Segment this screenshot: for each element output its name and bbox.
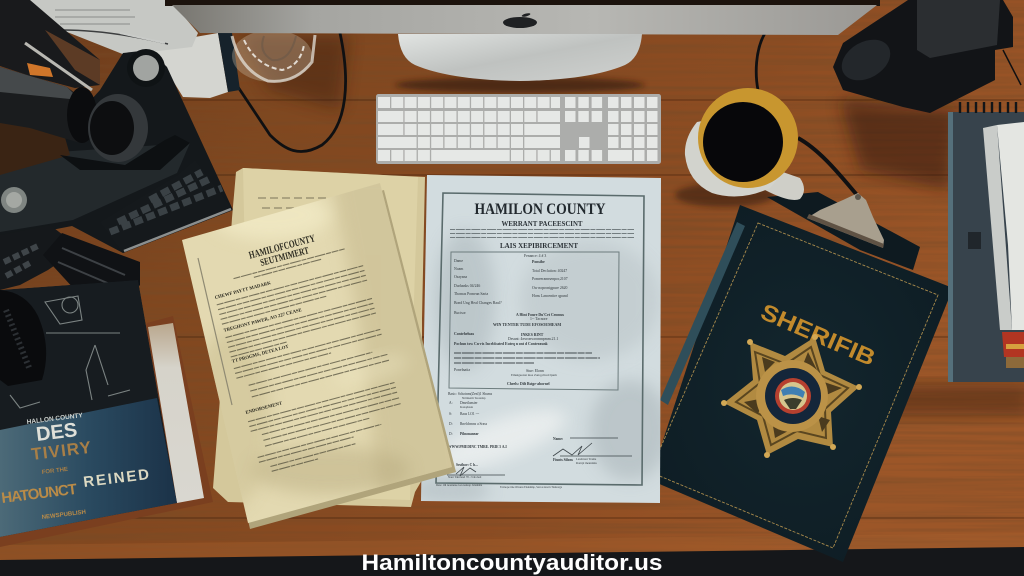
warrant numbered list: Tavnope tine Obsuru Endemnp, Savos nawrn Tianrorgs bbox=[500, 486, 562, 489]
warrant inner table bbox=[449, 252, 619, 390]
warrant inner table: INKES RINT bbox=[521, 333, 544, 337]
black desktop keyboard and camera gear bbox=[0, 0, 233, 290]
warrant numbered list: S: bbox=[449, 412, 452, 416]
warrant numbered list: Nrtitnerm Teoanlap bbox=[462, 396, 486, 400]
warrant numbered list: Baus LO1 --- bbox=[460, 412, 480, 416]
tan document highlighted section label: ENDORSEMENT bbox=[245, 401, 284, 416]
warrant numbered list: A: bbox=[449, 401, 453, 405]
keyboard bbox=[376, 94, 661, 164]
tan document subtitle: SEUTMIMERT bbox=[259, 245, 311, 269]
clipboard backing bbox=[767, 192, 920, 270]
magazine small heading: HALLON COUNTY bbox=[26, 412, 84, 426]
mug handle bbox=[765, 170, 804, 200]
warrant inner table: Hons Lancentire qpund bbox=[532, 294, 568, 298]
warrant numbered list: Nant Tahrtand 70. J Orobed bbox=[448, 475, 482, 479]
magazine publisher mark: NEWSPUBLISH bbox=[42, 510, 86, 521]
gold sheriff star badge bbox=[721, 334, 862, 458]
binoculars on the magazine corner bbox=[43, 233, 140, 307]
warrant numbered list: Basic: Schotnm(Zenl)1 Shums bbox=[448, 392, 493, 396]
tan document section heading one: CHEWF PAYTT MADARK bbox=[214, 281, 272, 301]
white warrant document bbox=[410, 175, 670, 504]
warrant numbered list: Rnelchmns a Srass bbox=[460, 422, 488, 426]
warrant inner table: Desant: 4nvronwronnnpmm.21.1 bbox=[508, 337, 558, 341]
warrant inner table: Ow nopronigpure 2620 bbox=[532, 286, 568, 290]
warrant inner table: Noam bbox=[454, 267, 463, 271]
warrant inner table: Thomas Pomean Saria bbox=[454, 292, 488, 296]
warrant title: HAMILON COUNTY bbox=[474, 201, 606, 218]
warrant inner table: Bond Ung Heal Changes Baul? bbox=[454, 301, 502, 305]
magazine blue photo bbox=[0, 398, 177, 537]
sheriff folder bbox=[650, 192, 953, 562]
warrant inner table: Emsngeoton ntoe Zonq pliced lpum bbox=[511, 373, 557, 377]
warrant inner table: Osayana bbox=[454, 275, 467, 279]
headset bbox=[0, 290, 46, 386]
coffee mug bbox=[685, 88, 804, 200]
warrant inner table: A Hint Foure Du'Cet Cromus bbox=[516, 313, 564, 317]
warrant subtitle: WERRANT PACEESCINT bbox=[502, 220, 583, 228]
warrant inner table: WIN TENTER TUDE EFOSOEMEAM bbox=[493, 322, 561, 327]
warrant inner table: Cheels: Dilt Bstge-abornel bbox=[507, 382, 550, 386]
tan document title: HAMILOFCOUNTY bbox=[248, 233, 317, 262]
warrant numbered list: D: bbox=[449, 432, 453, 436]
magazine illustration bbox=[10, 296, 130, 408]
icon: apple logo bbox=[503, 12, 537, 28]
warrant inner table: Dame bbox=[454, 259, 463, 263]
back stack of tan papers bbox=[213, 168, 425, 507]
magazine title TIVIRY: TIVIRY bbox=[30, 438, 93, 464]
tan document section heading two: TREGHONT PAWER, AO 227 CEASE bbox=[223, 308, 302, 334]
white sheet in tray bbox=[148, 323, 204, 503]
warrant inner table: Stue: Elonn bbox=[526, 369, 544, 373]
website caption: Hamiltoncountyauditor.us bbox=[362, 550, 662, 575]
tan document section heading three: TT PROGMS, DETEA LOT bbox=[232, 345, 290, 365]
gold stitched border bbox=[650, 223, 938, 548]
metal clip bbox=[807, 193, 884, 248]
warrant inner table: Fenance: 4 # 3 bbox=[524, 254, 546, 258]
framed tray behind magazine bbox=[0, 316, 213, 547]
warrant outer border bbox=[436, 193, 644, 485]
warrant numbered list: Rornpl meuntnks bbox=[576, 461, 598, 465]
warrant inner table: Durhanks 04/246 bbox=[454, 284, 480, 288]
warrant numbered list: Name: bbox=[553, 437, 563, 441]
warrant numbered list bbox=[436, 392, 598, 489]
monitor stand bbox=[398, 34, 642, 81]
desk cables bbox=[230, 33, 1021, 195]
warrant numbered list: Fiunts Silons bbox=[553, 458, 573, 462]
notebook right edge bbox=[948, 102, 1024, 382]
top-left stack of papers bbox=[27, 0, 240, 98]
warrant inner table: Total Declution: 40247 bbox=[532, 269, 567, 273]
magazine word REINED: REINED bbox=[82, 466, 150, 491]
magazine line FOR THE: FOR THE bbox=[42, 467, 68, 476]
water glass bbox=[232, 30, 315, 82]
tan document text bbox=[205, 223, 409, 474]
warrant numbered list: WWW.PMEDINC TMRE. PRIE 5 A.I bbox=[448, 445, 507, 449]
magazine title DES: DES bbox=[35, 419, 78, 446]
warrant section heading: LAIS XEPIBIRCEMENT bbox=[500, 241, 579, 250]
mug body bbox=[685, 110, 790, 197]
warrant inner table: 1-- Tacnore bbox=[530, 317, 548, 321]
warrant signature lines bbox=[447, 438, 632, 476]
warrant inner table: Ponsibe bbox=[532, 260, 545, 264]
warrant inner table: Pochun tow Cn-ris Incrldcated Euteq n ont d Conteraunk bbox=[454, 342, 549, 346]
magazine word HATOUNCT: HATOUNCT bbox=[0, 481, 78, 507]
warrant inner table: Buctsor bbox=[454, 311, 467, 315]
magazine bbox=[0, 280, 177, 537]
camera top right bbox=[833, 0, 1013, 113]
warrant numbered list: D: bbox=[449, 422, 453, 426]
warrant numbered list: Pilnonanear bbox=[460, 432, 479, 436]
monitor bottom edge bbox=[165, 0, 880, 35]
warrant numbered list: Date: Oil nrantunte bon nanrop Jonanaha bbox=[436, 484, 483, 487]
warrant inner table: Ponelnatia bbox=[454, 368, 470, 372]
mug rim bbox=[698, 88, 798, 188]
folder label SHERIFIB: SHERIFIB bbox=[757, 298, 879, 371]
warrant numbered list: Konqdusia bbox=[460, 405, 474, 409]
coffee surface bbox=[703, 102, 783, 182]
dark floor strip below the desk bbox=[0, 547, 1024, 576]
warrant inner table: Pomeerannsenpor,2107 bbox=[532, 277, 568, 282]
warrant numbered list: Sesthoe: C h... bbox=[456, 463, 478, 467]
warrant numbered list: Larehranr Trame bbox=[576, 457, 597, 461]
tilted tan document bbox=[182, 170, 470, 529]
warrant inner table: Conteheluas bbox=[454, 332, 475, 336]
warrant numbered list: Dmetlansier bbox=[460, 401, 478, 405]
